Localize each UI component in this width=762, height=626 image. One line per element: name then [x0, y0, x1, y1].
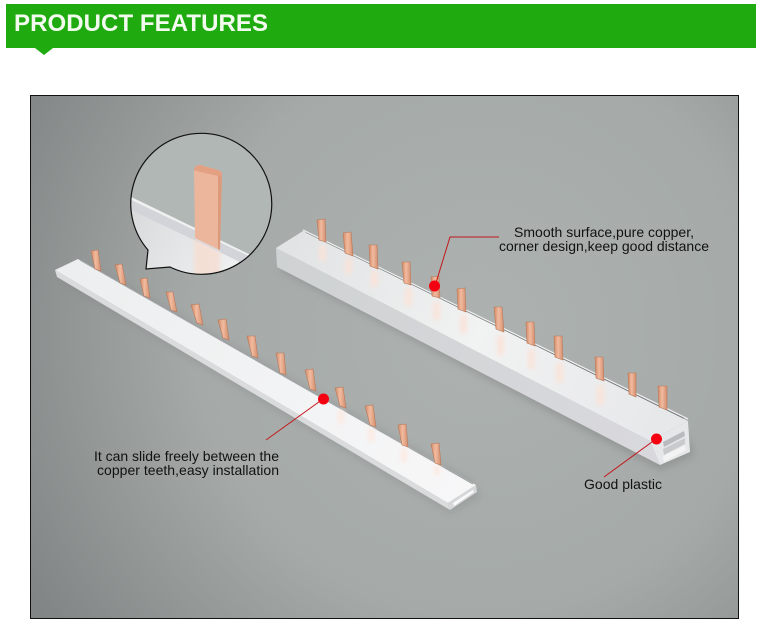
reflections	[338, 410, 440, 475]
white bar surface	[132, 210, 239, 274]
callout: slide freely: copper teeth,easy installation	[97, 462, 279, 478]
callout: smooth surface: corner design,keep good distance	[499, 238, 709, 254]
copper teeth	[91, 250, 441, 465]
enlarged copper tooth	[194, 165, 222, 250]
title: PRODUCT FEATURES	[14, 10, 268, 37]
side face	[55, 270, 450, 510]
callout: smooth surface	[429, 224, 709, 292]
slot line	[80, 260, 473, 484]
top face	[276, 231, 688, 441]
callout: good plastic	[584, 434, 662, 492]
callout: good plastic: Good plastic	[584, 476, 662, 492]
callout: slide freely: It can slide freely between the	[94, 448, 279, 464]
end face	[650, 421, 690, 465]
copper teeth	[317, 219, 667, 410]
callout: slide freely	[94, 394, 329, 478]
product: thin busbar	[55, 250, 481, 513]
end face	[448, 485, 477, 510]
callout: smooth surface: Smooth surface,pure copper,	[514, 224, 694, 240]
side face	[276, 248, 660, 465]
reflections	[319, 245, 604, 405]
detail magnifier callout	[125, 133, 272, 285]
product: large busbar	[276, 219, 694, 470]
top face	[55, 259, 476, 503]
header banner	[6, 4, 756, 55]
photo panel	[30, 96, 738, 618]
slot line	[306, 232, 684, 418]
